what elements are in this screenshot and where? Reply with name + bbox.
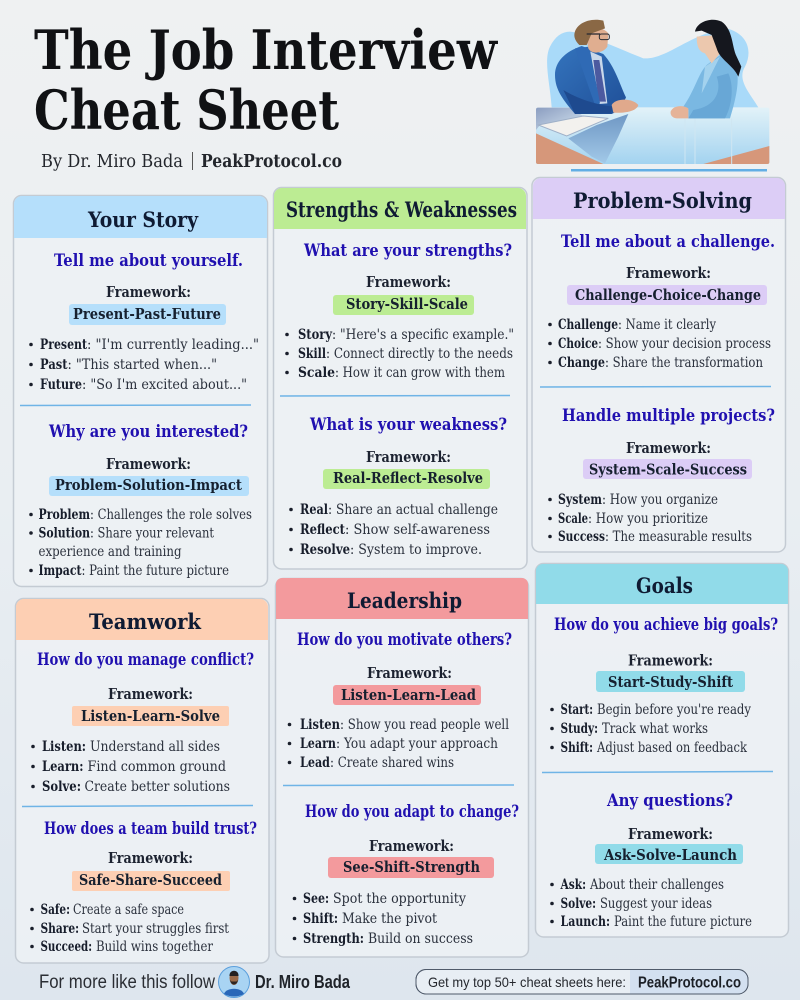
question: How do you motivate others? <box>297 630 512 649</box>
bullet list: : Show self-awareness <box>345 522 490 538</box>
byline <box>41 152 342 172</box>
framework label: Framework: <box>626 265 711 282</box>
title: The Job Interview <box>34 18 498 82</box>
heading: Leadership <box>276 578 528 619</box>
bullet list: Paint the future picture <box>614 914 752 930</box>
framework label: Framework: <box>366 449 451 466</box>
heading: Your Story: Your Story <box>87 207 199 232</box>
bullet list: : Share an actual challenge <box>328 502 498 518</box>
framework pill: Problem-Solution-Impact <box>55 477 242 494</box>
question: How do you manage conflict? <box>37 650 254 669</box>
bullet list: experience and training <box>38 544 182 560</box>
heading: Goals: Goals <box>636 573 693 598</box>
bullet list: Scale <box>558 511 588 527</box>
footer: follow credit: For more like this follow <box>39 972 215 993</box>
bullet list <box>31 739 230 795</box>
bullet list: Track what works <box>602 721 708 737</box>
bullet list: : "This started when..." <box>68 357 217 373</box>
bullet list: Past <box>40 357 68 373</box>
card background <box>16 598 269 963</box>
bullet list: See: <box>303 891 329 907</box>
footer: follow credit: Dr. Miro Bada <box>255 972 351 992</box>
framework label: Framework: <box>367 665 452 682</box>
bullet list <box>550 702 751 756</box>
bullet list: : Name it clearly <box>618 317 716 333</box>
framework label: Framework: <box>108 686 193 703</box>
bullet list: : "So I'm excited about..." <box>82 377 247 393</box>
bullet list: Succeed: <box>40 939 92 955</box>
framework label: Framework: <box>106 456 191 473</box>
bullet list: Safe: <box>40 902 70 918</box>
framework pill: Story-Skill-Scale <box>346 296 468 313</box>
woman <box>683 55 738 118</box>
footer: cheat sheets call to action: Get my top 50+ cheat sheets here: <box>428 974 626 990</box>
bullet list: Story <box>298 327 333 343</box>
bullet list: : Share your relevant <box>90 526 214 542</box>
bullet list <box>30 902 229 955</box>
question: Handle multiple projects? <box>562 406 775 425</box>
bullet list: Create a safe space <box>73 902 184 918</box>
bullet list: Suggest your ideas <box>600 896 712 912</box>
panel: Your Story <box>14 196 268 586</box>
bullet list: Listen: <box>42 739 86 755</box>
bullet list: : Show your decision process <box>598 336 771 352</box>
framework pill: Real-Reflect-Resolve <box>333 470 483 487</box>
bullet list: Launch: <box>560 914 610 930</box>
bullet list: : "Here's a specific example." <box>332 327 514 343</box>
bullet list: About their challenges <box>589 877 724 893</box>
bullet list <box>29 507 252 579</box>
bullet list: Real <box>300 502 328 518</box>
bullet list: Impact <box>38 563 82 579</box>
question: Tell me about a challenge. <box>561 232 775 251</box>
bullet list: Find common ground <box>88 759 226 775</box>
heading: Teamwork: Teamwork <box>89 609 201 634</box>
question: Any questions? <box>606 791 733 810</box>
bullet list: Start: <box>560 702 593 718</box>
bullet list: Make the pivot <box>342 911 437 927</box>
bullet list: Adjust based on feedback <box>596 740 747 756</box>
bullet list: Future <box>40 377 82 393</box>
heading: Strengths & Weaknesses: Strengths & Weaknesses <box>286 197 517 222</box>
framework label: Framework: <box>628 826 713 843</box>
framework pill: Listen-Learn-Solve <box>81 708 220 725</box>
byline: By Dr. Miro Bada <box>41 152 183 172</box>
card background <box>536 564 788 937</box>
bullet list: Listen <box>300 717 340 733</box>
framework pill: Listen-Learn-Lead <box>341 687 476 704</box>
bullet list: Resolve <box>300 542 350 558</box>
bullet list: Present <box>40 337 87 353</box>
bullet list: : How you prioritize <box>588 511 708 527</box>
bullet list: Shift: <box>303 911 338 927</box>
bullet list: : Share the transformation <box>605 355 763 371</box>
footer: cheat sheets call to action <box>416 970 748 994</box>
bullet list: Lead <box>300 755 330 771</box>
footer: cheat sheets call to action: PeakProtocol.co <box>638 974 741 992</box>
bullet list: Success <box>558 529 605 545</box>
bullet list: System <box>558 492 602 508</box>
bullet list: Build wins together <box>96 939 213 955</box>
heading: Problem-Solving <box>533 178 785 219</box>
bullet list: : How you organize <box>602 492 718 508</box>
bullet list: Change <box>558 355 605 371</box>
card background <box>276 578 528 957</box>
bullet list: Solve: <box>42 779 81 795</box>
heading: Problem-Solving: Problem-Solving <box>573 188 752 213</box>
bullet list <box>548 492 752 545</box>
question: How does a team build trust? <box>44 819 257 838</box>
heading: Leadership: Leadership <box>347 588 462 613</box>
bullet list: Shift: <box>560 740 593 756</box>
bullet list: Share: <box>40 921 79 937</box>
bullet list: Reflect <box>300 522 345 538</box>
framework label: Framework: <box>628 652 713 670</box>
bullet list <box>548 317 771 371</box>
bullet list: Start your struggles first <box>82 921 229 937</box>
icon: author avatar <box>218 966 250 998</box>
bullet list: : Connect directly to the needs <box>326 346 513 362</box>
bullet list: : The measurable results <box>605 529 752 545</box>
bullet list: : Challenges the role solves <box>90 507 252 523</box>
bullet list: Learn <box>300 736 336 752</box>
bullet list: Choice <box>558 336 598 352</box>
bullet list: Learn: <box>42 759 84 775</box>
bullet list: Solve: <box>560 896 596 912</box>
framework label: Framework: <box>366 274 451 291</box>
title: Cheat Sheet <box>34 78 339 142</box>
heading: Teamwork <box>16 599 268 640</box>
panel: Leadership <box>276 578 528 957</box>
bullet list: Scale <box>298 365 335 381</box>
bullet list: : "I'm currently leading..." <box>87 337 259 353</box>
heading: Goals <box>536 564 788 604</box>
byline: PeakProtocol.co <box>201 152 342 172</box>
bullet list: : Show you read people well <box>340 717 509 733</box>
question: Why are you interested? <box>48 422 248 441</box>
framework pill: Ask-Solve-Launch <box>603 847 737 864</box>
question: What is your weakness? <box>309 415 507 434</box>
framework pill: Safe-Share-Succeed <box>79 872 222 889</box>
framework label: Framework: <box>106 284 191 301</box>
framework pill: Challenge-Choice-Change <box>575 287 761 304</box>
card background <box>14 196 268 586</box>
bullet list: Ask: <box>560 877 586 893</box>
bullet list: Build on success <box>368 931 473 947</box>
question: What are your strengths? <box>303 241 512 260</box>
bullet list <box>285 327 514 381</box>
framework pill: Present-Past-Future <box>73 306 221 323</box>
panel: Teamwork <box>16 598 269 963</box>
title <box>34 18 498 142</box>
heading: Your Story <box>14 196 267 238</box>
bullet list: : You adapt your approach <box>336 736 498 752</box>
bullet list: Strength: <box>303 931 364 947</box>
bullet list: Begin before you're ready <box>597 702 751 718</box>
question: Tell me about yourself. <box>54 251 243 270</box>
bullet list <box>550 877 752 930</box>
framework pill: Start-Study-Shift <box>608 674 733 691</box>
question: How do you adapt to change? <box>305 802 519 821</box>
bullet list: : Paint the future picture <box>82 563 229 579</box>
bullet list <box>293 891 473 947</box>
panel: Problem-Solving <box>532 178 786 552</box>
bullet list: Challenge <box>558 317 618 333</box>
framework label: Framework: <box>626 440 711 457</box>
bullet list: Spot the opportunity <box>333 891 466 907</box>
bullet list <box>29 337 259 393</box>
bullet list <box>289 502 498 558</box>
panel: Strengths & Weaknesses <box>274 188 527 569</box>
footer: follow credit <box>39 966 351 998</box>
divider under illustration <box>571 169 767 172</box>
bullet list: : How it can grow with them <box>335 365 505 381</box>
bullet list <box>288 717 509 771</box>
bullet list: Understand all sides <box>90 739 220 755</box>
man <box>555 46 626 114</box>
bullet list: Skill <box>298 346 326 362</box>
bullet list: Create better solutions <box>84 779 230 795</box>
bullet list: Problem <box>38 507 90 523</box>
bullet list: : System to improve. <box>350 542 482 558</box>
bullet list: Solution <box>38 526 90 542</box>
panel: Goals <box>536 564 788 937</box>
bullet list: Study: <box>560 721 598 737</box>
framework pill: See-Shift-Strength <box>343 859 480 876</box>
card background <box>274 188 527 569</box>
bullet list: : Create shared wins <box>330 755 454 771</box>
heading: Strengths & Weaknesses <box>274 188 526 229</box>
framework label: Framework: <box>369 838 454 855</box>
illustration: interview at a desk <box>536 20 769 164</box>
card background <box>532 178 786 552</box>
framework pill: System-Scale-Success <box>589 462 747 478</box>
framework label: Framework: <box>108 850 193 867</box>
